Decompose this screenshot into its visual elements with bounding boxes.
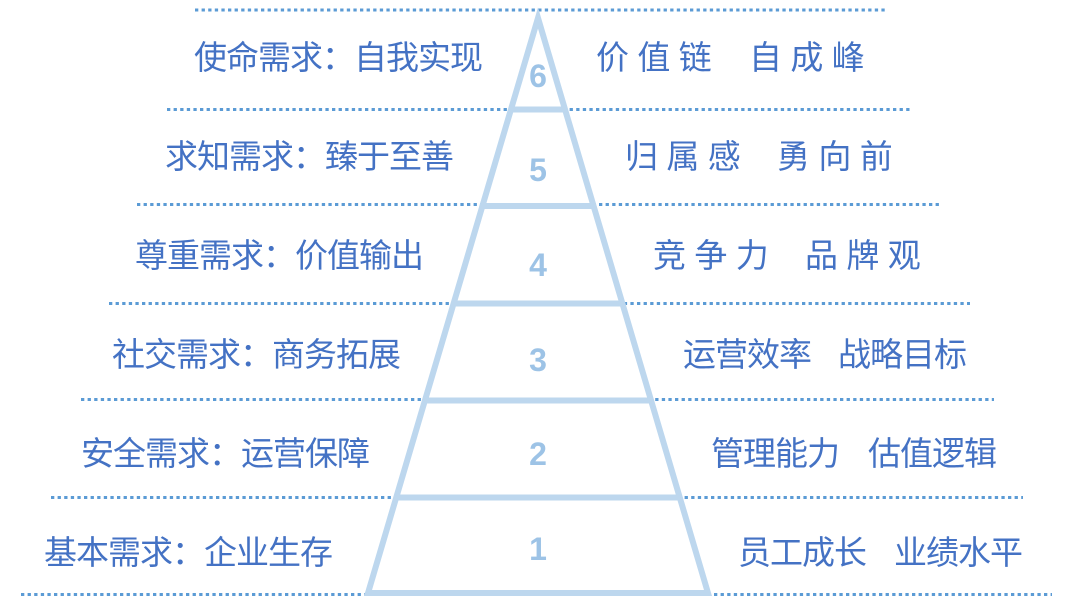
right labels: business meaning: 价值链 (596, 39, 720, 76)
left labels: needs: 安全需求：运营保障 (81, 427, 369, 475)
pyramid level numbers: 4 (529, 247, 547, 283)
right labels: business meaning (596, 39, 1022, 571)
right labels: business meaning: 归属感 (625, 138, 749, 175)
right labels: business meaning: 员工成长 (738, 534, 866, 571)
pyramid level numbers: 6 (529, 58, 547, 94)
pyramid level numbers: 5 (529, 152, 547, 188)
right labels: business meaning: 竞争力 (653, 237, 777, 274)
pyramid level numbers: 3 (529, 342, 547, 378)
right labels: business meaning: 勇向前 (777, 138, 901, 175)
pyramid level numbers: 1 (529, 531, 547, 567)
right labels: business meaning: 运营效率 (683, 336, 811, 373)
right labels: business meaning: 品牌观 (805, 237, 929, 274)
pyramid level numbers: 2 (529, 436, 547, 472)
right labels: business meaning: 估值逻辑 (868, 435, 996, 472)
pyramid outline (368, 18, 708, 593)
right labels: business meaning: 战略目标 (838, 336, 966, 373)
right labels: business meaning: 管理能力 (711, 435, 839, 472)
right labels: business meaning: 自成峰 (749, 39, 873, 76)
left labels: needs: 基本需求：企业生存 (44, 526, 332, 574)
pyramid level numbers (529, 58, 547, 567)
left labels: needs: 使命需求：自我实现 (194, 31, 482, 79)
left labels: needs: 求知需求：臻于至善 (165, 130, 453, 178)
right labels: business meaning: 业绩水平 (894, 534, 1022, 571)
left labels: needs: 尊重需求：价值输出 (135, 229, 423, 277)
left labels: needs (44, 31, 482, 574)
left labels: needs: 社交需求：商务拓展 (112, 328, 400, 376)
